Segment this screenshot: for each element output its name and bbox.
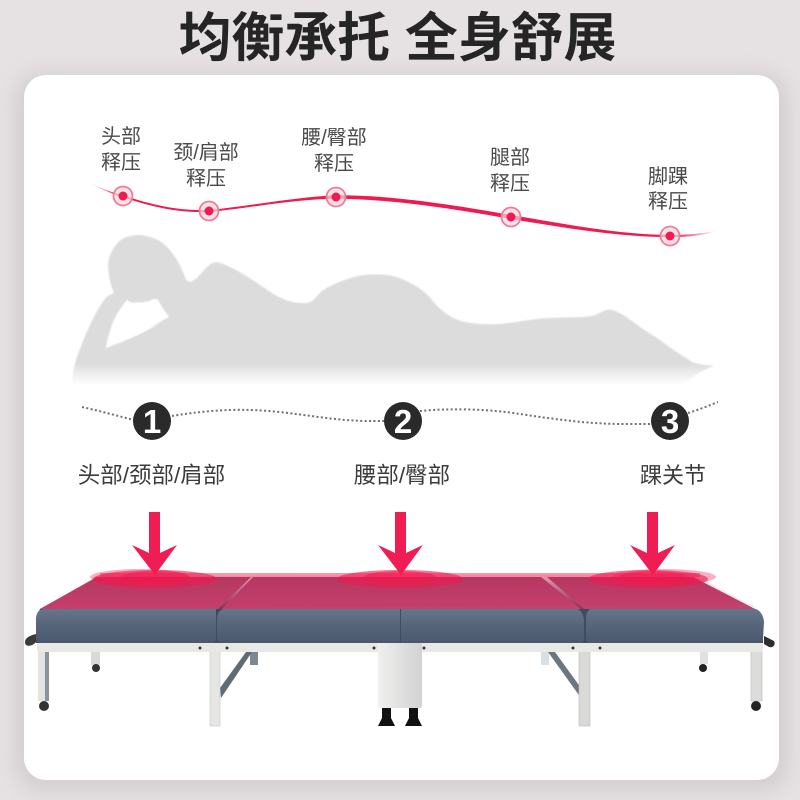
label: neck and shoulder: 颈/肩部 bbox=[173, 142, 239, 164]
title: 均衡承托 全身舒展 bbox=[179, 9, 616, 68]
pink pressure wash bbox=[40, 573, 757, 609]
mattress top backing bbox=[40, 577, 755, 609]
marker: ankle bbox=[660, 226, 680, 246]
marker: leg bbox=[502, 208, 520, 226]
badge 1: 1 bbox=[143, 403, 161, 440]
badge 1 bbox=[133, 402, 171, 440]
side handles bbox=[25, 634, 775, 647]
marker: neck bbox=[200, 202, 218, 220]
badge 3 bbox=[651, 402, 689, 440]
arrow 3 bbox=[630, 512, 675, 575]
pressure labels bbox=[101, 125, 688, 213]
centre support box bbox=[378, 642, 422, 726]
badge 2 bbox=[384, 402, 422, 440]
front legs bbox=[38, 651, 762, 726]
badge 3: 3 bbox=[661, 403, 679, 440]
mattress side backing bbox=[36, 609, 763, 643]
pressure zone 1 bbox=[90, 569, 217, 588]
folding bed bbox=[25, 573, 775, 726]
human silhouette bbox=[72, 235, 714, 388]
badge 2: 2 bbox=[394, 403, 412, 440]
label: waist and hip: 腰/臀部 bbox=[301, 127, 367, 149]
marker: head bbox=[114, 186, 132, 206]
zone label 1: 头部/颈部/肩部 bbox=[78, 463, 225, 488]
zone label 2: 腰部/臀部 bbox=[354, 463, 450, 488]
frame rail bbox=[37, 642, 763, 652]
dotted support line bbox=[82, 402, 718, 424]
label: head: 头部 bbox=[101, 126, 141, 148]
marker: waist bbox=[326, 188, 346, 206]
frame rivets bbox=[198, 646, 602, 650]
rear legs and braces bbox=[91, 651, 708, 698]
pressure zone 3 bbox=[588, 569, 716, 588]
label: ankle: 脚踝 bbox=[648, 166, 688, 188]
label: leg: 腿部 bbox=[490, 147, 530, 169]
mattress tops bbox=[40, 577, 755, 609]
label: waist and hip: 释压 bbox=[314, 152, 354, 175]
label: head: 释压 bbox=[101, 151, 141, 174]
label: ankle: 释压 bbox=[648, 190, 688, 213]
arrow 1 bbox=[132, 512, 177, 575]
pressure curve bbox=[90, 183, 716, 246]
pressure zone 2 bbox=[337, 570, 463, 588]
mattress sides bbox=[36, 609, 764, 643]
label: neck and shoulder: 释压 bbox=[186, 167, 226, 190]
label: leg: 释压 bbox=[490, 172, 530, 195]
zone label 3: 踝关节 bbox=[640, 463, 706, 488]
arrow 2 bbox=[378, 512, 423, 575]
